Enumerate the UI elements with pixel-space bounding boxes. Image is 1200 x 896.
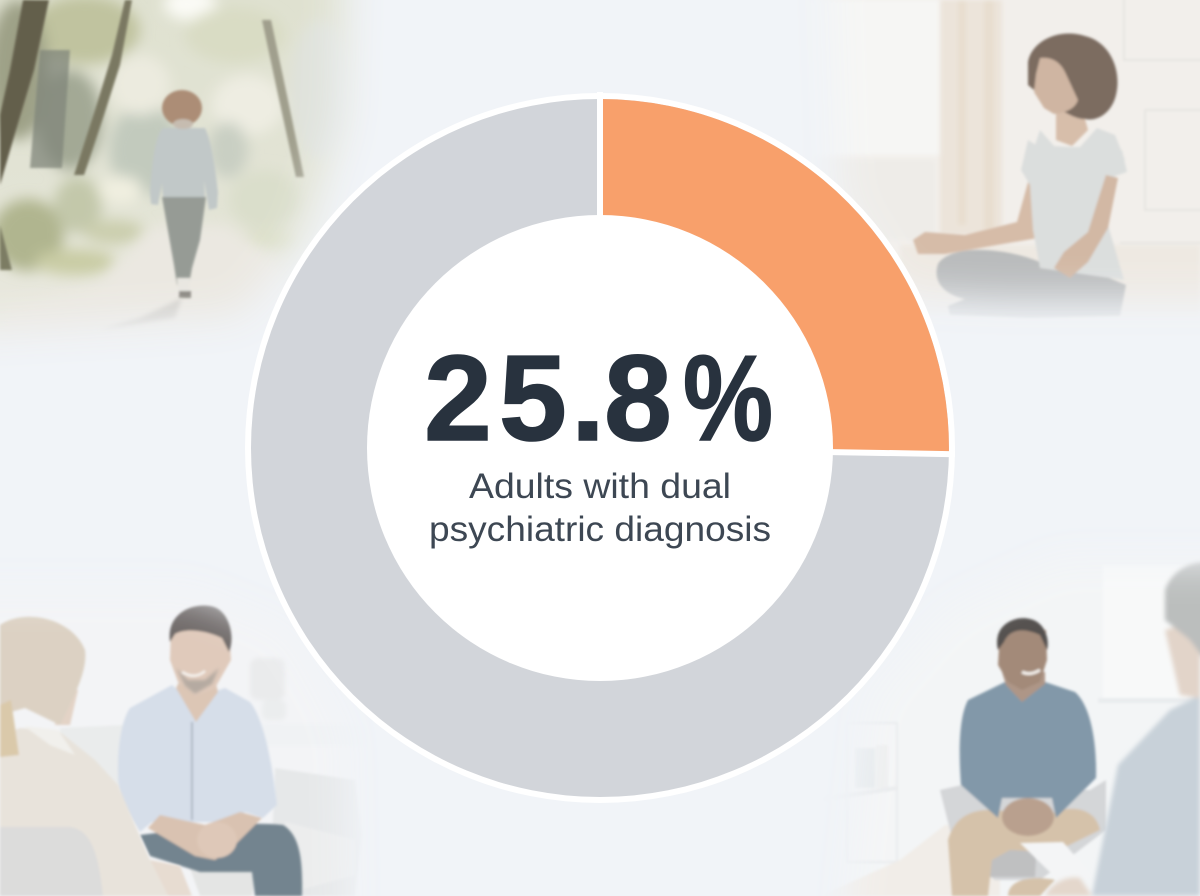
counsellor seen from behind bbox=[1045, 562, 1200, 896]
donut chart: 25.8% share bbox=[245, 92, 955, 803]
photo: woman meditating in bright room bbox=[841, 0, 1200, 318]
statistic caption: psychiatric diagnosis bbox=[429, 510, 771, 549]
photo: woman walking on forest path bbox=[0, 0, 360, 338]
window light and curtain bbox=[860, 0, 1196, 274]
inner white hole bbox=[367, 215, 833, 681]
orange highlighted segment bbox=[600, 99, 949, 454]
window and shelf bbox=[854, 699, 1182, 896]
photo: therapy session with man in blue sweater bbox=[852, 561, 1200, 896]
big statistic: 25.8% bbox=[424, 330, 773, 466]
meditating woman figure bbox=[913, 34, 1127, 318]
walker shadow bbox=[133, 300, 180, 323]
wall panels bbox=[1120, 0, 1200, 243]
forest path bbox=[108, 230, 258, 275]
walking woman figure bbox=[150, 90, 218, 298]
woman seen from behind bbox=[0, 617, 192, 896]
statistic caption bbox=[429, 467, 771, 549]
tablet on lap bbox=[1020, 840, 1074, 872]
background shelf and vases bbox=[252, 660, 282, 703]
white sofa bbox=[60, 725, 362, 896]
photo: therapy session with man in blue shirt bbox=[0, 604, 345, 896]
outer white ring bbox=[245, 93, 955, 803]
forest foliage bbox=[0, 0, 350, 275]
statistic caption: Adults with dual bbox=[469, 467, 731, 506]
grey remainder segment bbox=[251, 99, 949, 797]
tree trunks bbox=[0, 0, 304, 270]
man in blue shirt bbox=[118, 606, 302, 896]
man in blue sweater bbox=[940, 618, 1106, 896]
